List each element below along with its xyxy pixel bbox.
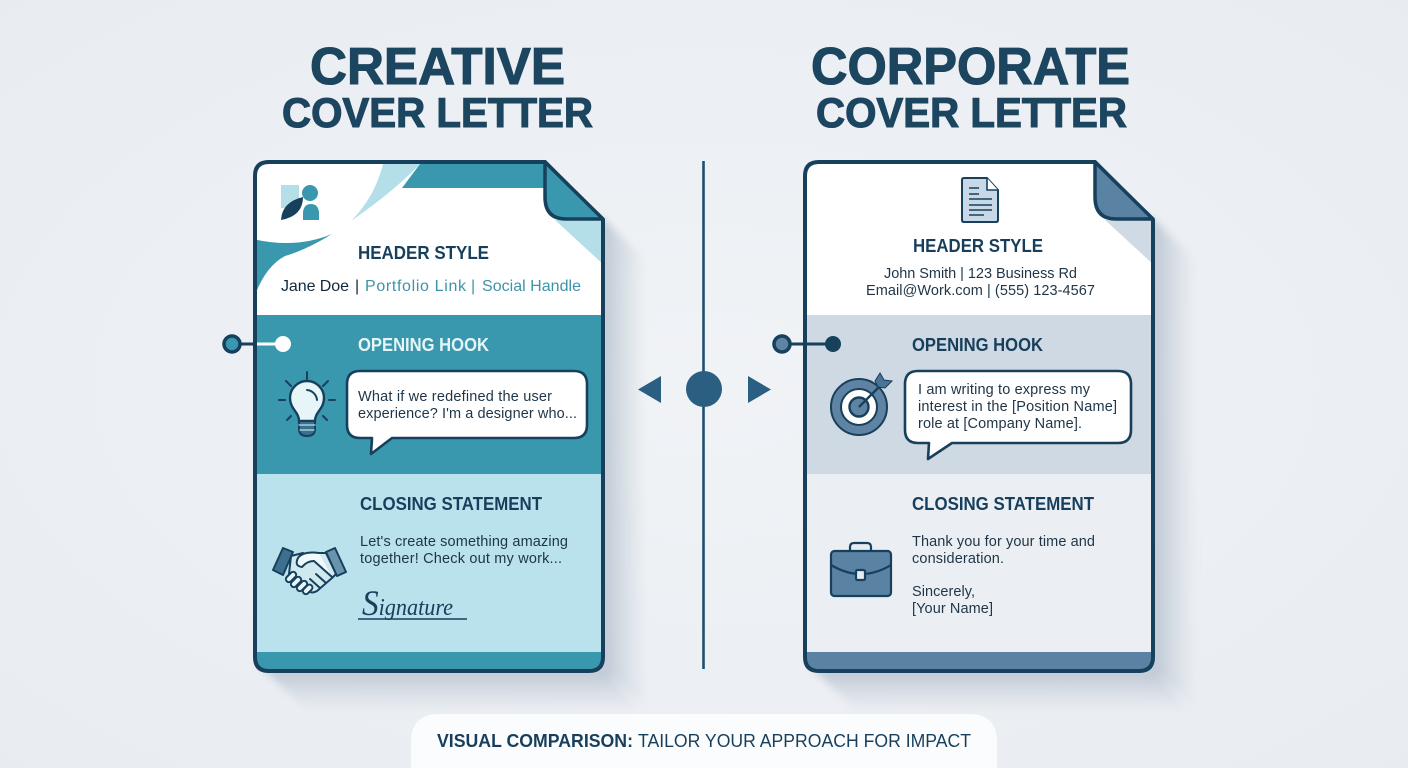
callout: corporate opening hook: role at [Company Name].	[918, 416, 1082, 432]
text: corporate closing: [Your Name]	[912, 601, 993, 617]
title: creative cover letter: COVER LETTER	[282, 89, 593, 136]
icon: abstract creative logo	[281, 185, 319, 220]
text: creative closing	[360, 534, 568, 567]
icon: light bulb	[279, 372, 335, 436]
callout: corporate opening hook	[905, 371, 1131, 459]
icon: target	[831, 373, 892, 435]
footer banner: VISUAL COMPARISON:	[437, 731, 633, 751]
text: corporate closing: Sincerely,	[912, 584, 975, 600]
signature: Signature	[362, 583, 453, 623]
heading: opening hook: OPENING HOOK	[358, 335, 489, 355]
header text: John Smith | 123 Business Rd	[884, 266, 1077, 282]
letter outline	[805, 162, 1153, 671]
text: corporate closing: consideration.	[912, 551, 1004, 567]
letter outline	[255, 162, 603, 671]
text: creative closing: together! Check out my work...	[360, 551, 562, 567]
icon: document	[962, 178, 998, 222]
panel: creative letter	[224, 160, 646, 712]
footer banner	[411, 714, 997, 768]
header text: Jane Doe	[281, 278, 349, 295]
title: corporate cover letter: COVER LETTER	[816, 89, 1127, 136]
text: creative closing: Let's create something amazing	[360, 534, 568, 550]
header text: Portfolio Link	[365, 278, 467, 295]
icon: handshake	[273, 548, 346, 595]
header text: |	[471, 278, 475, 295]
callout: creative opening hook: experience? I'm a designer who...	[358, 406, 577, 422]
title: corporate cover letter	[811, 38, 1130, 136]
header text: HEADER STYLE	[358, 243, 489, 263]
panel: corporate letter	[774, 160, 1196, 712]
heading: closing statement: CLOSING STATEMENT	[360, 494, 542, 514]
heading: opening hook: OPENING HOOK	[912, 335, 1043, 355]
connector: opening hook marker	[774, 336, 841, 352]
header text	[866, 236, 1095, 299]
header text: |	[355, 278, 359, 295]
text: corporate closing: Thank you for your time and	[912, 534, 1095, 550]
header text: Social Handle	[482, 278, 581, 295]
header text: HEADER STYLE	[913, 236, 1043, 256]
callout: corporate opening hook: I am writing to express my	[918, 382, 1091, 398]
callout: corporate opening hook: interest in the [Position Name]	[918, 399, 1117, 415]
icon: briefcase	[831, 543, 891, 596]
heading: closing statement: CLOSING STATEMENT	[912, 494, 1094, 514]
header text	[281, 243, 581, 295]
divider with arrows	[638, 161, 771, 669]
callout: creative opening hook	[347, 371, 587, 454]
footer banner: TAILOR YOUR APPROACH FOR IMPACT	[638, 731, 971, 751]
callout: creative opening hook: What if we redefined the user	[358, 389, 552, 405]
page fold	[1095, 162, 1153, 219]
title: creative cover letter	[282, 38, 593, 136]
title: corporate cover letter: CORPORATE	[811, 38, 1130, 96]
page fold	[545, 162, 603, 219]
connector: opening hook marker	[224, 336, 291, 352]
text: corporate closing	[912, 534, 1095, 617]
header text: Email@Work.com | (555) 123-4567	[866, 283, 1095, 299]
title: creative cover letter: CREATIVE	[310, 38, 565, 96]
